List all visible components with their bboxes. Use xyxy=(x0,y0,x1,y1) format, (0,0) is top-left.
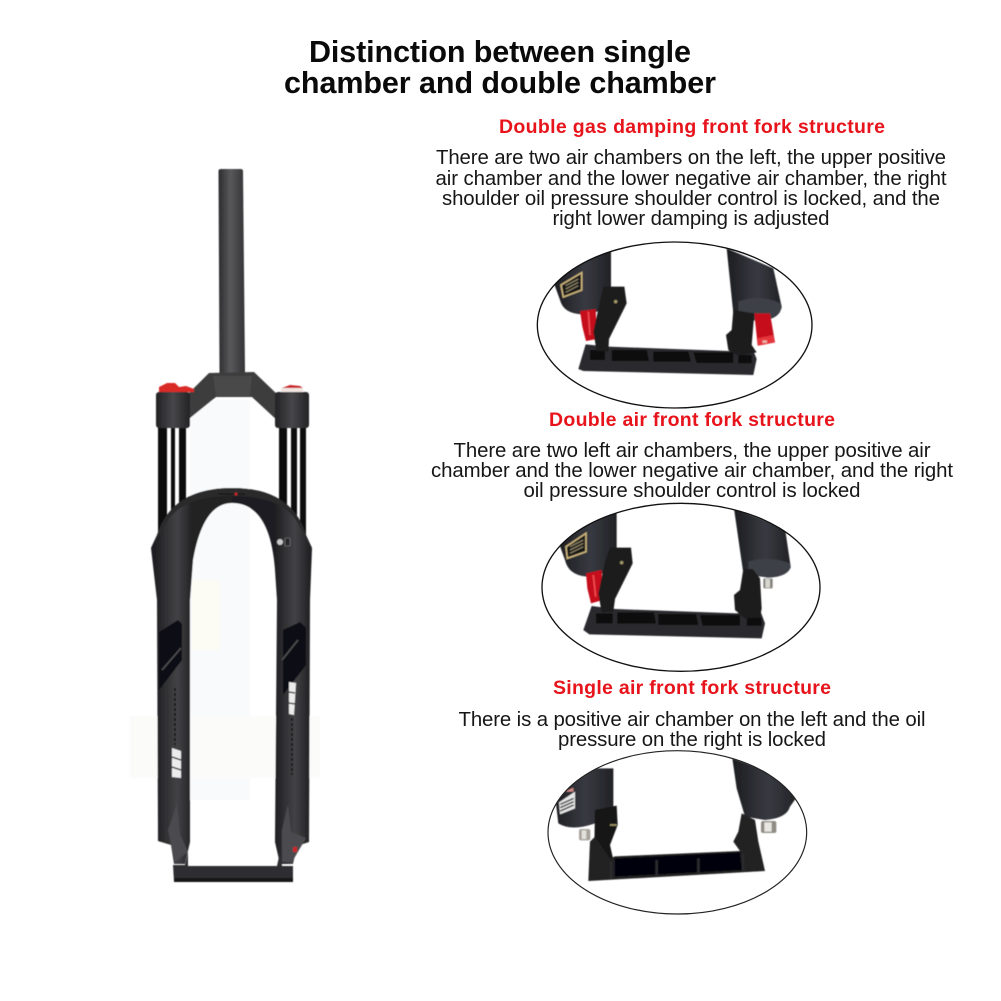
description: double gas damping: right lower damping is adjusted xyxy=(552,208,830,230)
description: double gas damping: shoulder oil pressure shoulder control is locked, and the xyxy=(442,188,940,210)
section heading: double air: Double air front fork structure xyxy=(549,409,835,431)
description: single air: pressure on the right is locked xyxy=(558,729,826,751)
description: double air: chamber and the lower negative air chamber, and the right xyxy=(431,460,953,482)
detail circle: double air xyxy=(542,503,820,671)
detail circle: double gas damping xyxy=(537,242,812,408)
red adjuster knobs xyxy=(159,383,194,392)
title: Distinction between single xyxy=(309,35,691,69)
title xyxy=(284,35,716,100)
logos xyxy=(172,748,181,778)
title: chamber and double chamber xyxy=(284,66,716,100)
detail circle: single air xyxy=(548,751,807,914)
description: double gas damping xyxy=(436,147,947,230)
dropouts xyxy=(168,804,188,862)
description: double air: oil pressure shoulder control is locked xyxy=(524,480,860,502)
description: double gas damping: There are two air chambers on the left, the upper positive xyxy=(436,147,946,169)
description: single air xyxy=(458,709,926,751)
lower arch and left leg xyxy=(151,488,232,864)
faint photo background remnants xyxy=(130,400,320,800)
steerer tube xyxy=(218,169,245,374)
front fork product illustration xyxy=(130,169,320,882)
description: single air: There is a positive air chamber on the left and the oil xyxy=(458,709,926,731)
section heading: single air: Single air front fork structure xyxy=(553,677,831,699)
section heading: double gas damping: Double gas damping front fork structure xyxy=(499,116,885,138)
bottom bridge xyxy=(173,852,293,882)
leg small print xyxy=(174,688,176,745)
description: double air: There are two left air chambers, the upper positive air xyxy=(454,440,931,462)
description: double air xyxy=(431,440,953,502)
stanchions xyxy=(158,425,306,560)
shoulder button xyxy=(277,539,283,545)
right leg xyxy=(232,488,312,864)
crown arch xyxy=(186,372,279,422)
leg graphics xyxy=(159,620,182,690)
description: double gas damping: air chamber and the lower negative air chamber, the right xyxy=(436,168,947,190)
crown caps xyxy=(156,392,190,428)
